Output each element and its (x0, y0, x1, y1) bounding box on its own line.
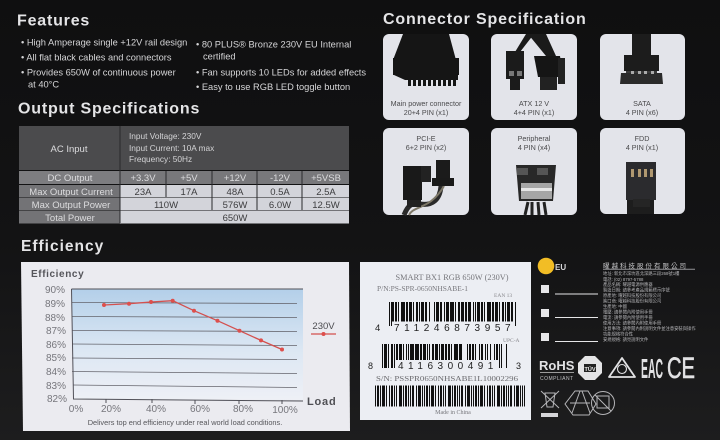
heading: Connector Specification: Connector Specification (383, 11, 587, 28)
output specifications table: DC Output (48, 173, 93, 184)
barcode: EAN-13 (375, 314, 517, 334)
line chart: efficiency vs load: 83% (46, 381, 66, 392)
panel: efficiency chart: Efficiency (31, 269, 84, 280)
features list: left column: • Provides 650W of continuous power (21, 68, 176, 78)
features list: left column: • High Amperage single +12V rail design (21, 38, 187, 48)
card: Peripheral (491, 128, 577, 215)
product barcode label: S/N: PSSPR0650NHSABE1L10002296 (376, 375, 519, 383)
card: main power connector: 20+4 PIN (x1) (404, 108, 448, 117)
output specifications table: 2.5A (316, 187, 336, 198)
icon: 24-pin connector (393, 34, 459, 86)
logo: RoHS compliant: COMPLIANT (540, 376, 574, 382)
text: EAC (641, 353, 663, 384)
product barcode label: Made in China (435, 410, 471, 416)
manufacturer information: 電流: 請參閱內附使用手冊 (603, 314, 653, 321)
barcode: serial (375, 386, 525, 406)
axis label: Load: Load (307, 396, 336, 408)
heading: Output Specifications: Output Specifications (18, 100, 200, 118)
EU marker: EU (555, 263, 566, 272)
features list: right column: • 80 PLUS® Bronze 230V EU Internal (196, 40, 351, 50)
logo: CE mark: CE (667, 352, 695, 385)
output specifications table (19, 126, 349, 224)
barcode: EAN-13: 4 (375, 323, 380, 334)
legend: 230V (311, 321, 336, 336)
output specifications table: Total Power (45, 213, 95, 224)
output specifications table: 110W (154, 200, 178, 211)
EU marker (538, 258, 566, 274)
icon: SATA connector (620, 34, 663, 84)
output specifications table: 23A (135, 187, 152, 198)
output specifications table: Frequency: 50Hz (129, 154, 192, 164)
product barcode label (360, 262, 531, 420)
logo: RoHS compliant (539, 358, 575, 382)
card: FDD: FDD (635, 134, 649, 143)
manufacturer information: 功能規格符合性 (603, 330, 634, 338)
output specifications table: 650W (223, 213, 247, 224)
line chart: efficiency vs load: 90% (45, 285, 65, 296)
card: Peripheral: Peripheral (518, 134, 551, 143)
manufacturer information: 製造日期: 請參考產品規範標示序號 (603, 286, 671, 294)
product barcode label: SMART BX1 RGB 650W (230V) (395, 273, 509, 282)
logo: TUV badge: TÜV (584, 366, 596, 373)
output specifications table: 576W (223, 200, 247, 211)
features list: right column: certified (203, 52, 236, 62)
card: ATX 12V: ATX 12 V (519, 99, 549, 108)
manufacturer information: 電壓: 請參閱內附使用手冊 (603, 308, 653, 316)
barcode: UPC-A: 4116300491 (398, 361, 498, 372)
card: Peripheral: 4 PIN (x4) (518, 143, 550, 152)
output specifications table: +5V (180, 173, 198, 184)
card: SATA: SATA (633, 99, 651, 108)
line chart: efficiency vs load: 84% (46, 367, 66, 378)
card: SATA (600, 34, 685, 120)
output specifications table: 12.5W (312, 200, 340, 211)
line chart: efficiency vs load: 88% (45, 313, 65, 324)
card: main power connector: Main power connector (391, 99, 462, 108)
line chart: efficiency vs load: 82% (47, 394, 67, 405)
line chart: efficiency vs load: 80% (233, 404, 253, 415)
legend: 230V: 230V (312, 321, 335, 332)
line chart: efficiency vs load: 40% (146, 404, 166, 415)
region checkboxes (541, 285, 598, 342)
icon: PCI-E connector (403, 160, 454, 215)
card: SATA: 4 PIN (x6) (626, 108, 658, 117)
manufacturer information: 產品名稱: 曜越電源供應器 (603, 281, 653, 288)
card: PCI-E: 6+2 PIN (x2) (406, 143, 446, 152)
features list: left column (21, 38, 187, 90)
card: ATX 12V (491, 34, 577, 120)
output specifications table: +3.3V (130, 173, 156, 184)
product barcode label: P/N:PS-SPR-0650NHSABE-1 (377, 284, 468, 293)
features list: left column: • All flat black cables and connectors (21, 52, 172, 62)
features list: right column (196, 40, 366, 92)
line chart: efficiency vs load: 89% (45, 299, 65, 310)
icon: ATX connector (506, 34, 565, 90)
manufacturer information: 進口商: 曜越科技股份有限公司 (603, 298, 661, 304)
manufacturer information: 電話: (02) 8797-5788 (603, 276, 644, 283)
output specifications table: 6.0W (269, 200, 291, 211)
features list: right column: • Fan supports 10 LEDs for added effects (196, 68, 366, 78)
barcode: UPC-A (368, 356, 521, 372)
product barcode label: EAN 13 (494, 293, 512, 299)
card: FDD: 4 PIN (x1) (626, 143, 658, 152)
line chart: efficiency vs load: 86% (46, 340, 66, 351)
manufacturer information: 曜越科技股份有限公司 (603, 261, 688, 270)
manufacturer information: 安規規格: 請見說明文件 (603, 336, 649, 343)
output specifications table: Max Output Power (32, 200, 110, 211)
output specifications table: Input Current: 10A max (129, 143, 215, 153)
output specifications table: 17A (181, 187, 198, 198)
heading: Efficiency: Efficiency (21, 238, 104, 255)
heading: Features: Features (17, 12, 90, 30)
barcode: EAN-13: 711246873957 (394, 323, 515, 334)
panel: efficiency chart (21, 262, 350, 431)
chart caption: Delivers top end efficiency under real world load conditions. (88, 418, 282, 427)
card: ATX 12V: 4+4 PIN (x1) (514, 108, 554, 117)
line chart: efficiency vs load: 60% (190, 404, 210, 415)
manufacturer information: 原產地: 曜越科技股份有限公司 (603, 292, 661, 299)
manufacturer information: 地址: 新北市深坑區北深路三段268號1樓 (603, 270, 680, 277)
card: main power connector (383, 34, 469, 120)
recycling and disposal icons (541, 391, 614, 417)
barcode: UPC-A: 3 (516, 361, 521, 371)
line chart: efficiency vs load: 20% (101, 404, 121, 415)
line chart: efficiency vs load: 85% (46, 353, 66, 364)
output specifications table: 0.5A (270, 187, 290, 198)
manufacturer information: 注意事項: 請參閱內附說明文件並注意安裝與操作 (603, 325, 696, 332)
features list: right column: • Easy to use RGB LED toggle button (196, 82, 350, 92)
line chart: efficiency vs load (45, 285, 303, 416)
icon: Molex connector (516, 165, 556, 215)
features list: left column: at 40°C (28, 80, 59, 90)
card: PCI-E: PCI-E (416, 134, 436, 143)
output specifications table: AC Input (51, 144, 88, 155)
barcode: UPC-A: 8 (368, 361, 373, 371)
output specifications table: Max Output Current (29, 187, 113, 198)
card: PCI-E (383, 128, 469, 215)
card: FDD (600, 128, 685, 214)
product barcode label: UPC-A (503, 338, 520, 344)
icon: FDD connector (626, 162, 656, 214)
output specifications table: -12V (270, 173, 291, 184)
logo: TUV badge (578, 356, 602, 380)
output specifications table: +12V (224, 173, 247, 184)
line chart: efficiency vs load: 87% (46, 326, 66, 337)
output specifications table: Input Voltage: 230V (129, 131, 202, 141)
manufacturer information (603, 261, 696, 343)
line chart: efficiency vs load: 0% (69, 404, 83, 415)
output specifications table: 48A (227, 187, 244, 198)
line chart: efficiency vs load: 100% (272, 405, 298, 416)
logo: RoHS compliant: RoHS (539, 358, 575, 373)
manufacturer information: 生產地: 中國 (603, 303, 627, 310)
logo: RCM triangle (609, 358, 635, 377)
output specifications table: +5VSB (311, 173, 341, 184)
manufacturer information: 使用方法: 請參閱內附使用手冊 (603, 320, 662, 326)
